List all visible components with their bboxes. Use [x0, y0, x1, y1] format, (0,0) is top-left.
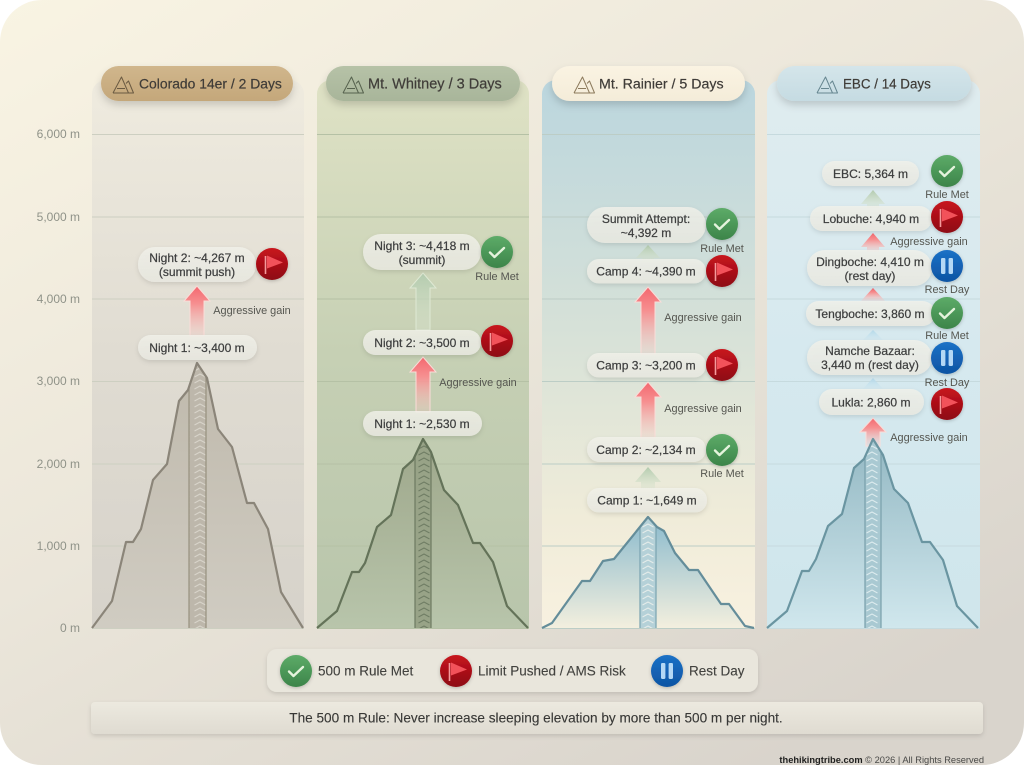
label: Namche Bazaar: Namche Bazaar:: [825, 344, 915, 358]
legend text: rest day: Rest Day: [689, 664, 745, 678]
arrow: rule met Camp 1 to Camp 2: [635, 467, 661, 489]
panel: Mt. Whitney: [317, 66, 529, 629]
caption: rule met: Rule Met: [700, 243, 744, 255]
caption: aggressive gain: Aggressive gain: [890, 432, 968, 444]
label: Lobuche: Lobuche: 4,940 m: [823, 212, 919, 226]
label: Camp 2: [587, 437, 706, 462]
footer credit: thehikingtribe.com © 2026 | All Rights Reserved: [779, 755, 984, 765]
arrow: aggressive gain to Lukla: [860, 418, 886, 446]
icon: red flag: [931, 201, 963, 233]
mountain profile: EBC: [767, 436, 978, 629]
label: Namche Bazaar: 3,440 m (rest day): [821, 358, 919, 372]
label: Namche Bazaar: [807, 340, 932, 375]
icon: legend pause: [651, 655, 683, 687]
panel: EBC: [767, 66, 980, 629]
caption: rule met: Rule Met: [475, 271, 519, 283]
label: Camp 1: [587, 488, 707, 512]
elevation axis labels: 4,000 m: [37, 292, 80, 306]
label: Dingboche: [807, 250, 932, 286]
elevation axis labels: 1,000 m: [37, 539, 80, 553]
elevation axis labels: 3,000 m: [37, 374, 80, 388]
label: Night 3: [363, 234, 481, 270]
caption: rest day: Rest Day: [925, 377, 970, 389]
label: Night 1: Night 1: ~2,530 m: [374, 417, 470, 431]
header: Colorado 14er: Colorado 14er / 2 Days: [139, 76, 282, 92]
mountain profile: Mt. Rainier: [542, 514, 754, 629]
label: Lukla: [819, 389, 924, 415]
rule statement bar: [91, 702, 983, 734]
caption: rule met: Rule Met: [925, 189, 969, 201]
label: Night 2: [138, 247, 256, 282]
icon: check: [931, 297, 963, 329]
label: Night 1: [363, 411, 482, 436]
arrow: Namche to Tengboche: [861, 330, 885, 342]
legend: [267, 649, 758, 692]
arrow: rule met Night 2 to Night 3: [410, 273, 436, 330]
caption: rule met: Rule Met: [925, 330, 969, 342]
label: Camp 4: Camp 4: ~4,390 m: [596, 264, 696, 278]
label: Dingboche: (rest day): [845, 269, 895, 283]
arrow: aggressive gain Night 1 to Night 2: [410, 357, 436, 412]
elevation axis labels: 2,000 m: [37, 457, 80, 471]
label: Night 3: Night 3: ~4,418 m: [374, 239, 470, 253]
legend text: limit pushed: Limit Pushed / AMS Risk: [478, 664, 626, 678]
label: Night 2: Night 2: ~3,500 m: [374, 336, 470, 350]
label: Night 2: (summit push): [159, 265, 235, 279]
label: EBC: [822, 161, 919, 186]
label: Summit Attempt: Summit Attempt:: [602, 212, 690, 226]
icon: red flag: [256, 248, 288, 280]
panel: Mt. Rainier: [542, 66, 755, 629]
icon: check: [706, 208, 738, 240]
label: Lukla: Lukla: 2,860 m: [831, 396, 911, 410]
icon: pause: [931, 342, 963, 374]
label: Camp 2: Camp 2: ~2,134 m: [596, 443, 696, 457]
icon: check: [706, 434, 738, 466]
label: Summit Attempt: ~4,392 m: [621, 226, 671, 240]
label: Camp 3: Camp 3: ~3,200 m: [596, 358, 696, 372]
rule statement bar: The 500 m Rule: Never increase sleeping elevation by more than 500 m per night.: [289, 710, 783, 726]
caption: aggressive gain: Aggressive gain: [213, 305, 291, 317]
label: Dingboche: Dingboche: 4,410 m: [816, 255, 924, 269]
label: Camp 1: Camp 1: ~1,649 m: [597, 494, 697, 508]
icon: check: [931, 155, 963, 187]
icon: red flag: [706, 349, 738, 381]
icon: legend check: [280, 655, 312, 687]
mountain profile: Colorado 14er: [92, 360, 303, 629]
legend text: rule met: 500 m Rule Met: [318, 664, 414, 678]
icon: legend flag: [440, 655, 472, 687]
header: Mt. Whitney: [326, 66, 520, 101]
label: Night 1: [138, 335, 257, 360]
arrow: rule met Camp 4 to Summit: [636, 245, 660, 262]
label: Night 2: Night 2: ~4,267 m: [149, 251, 245, 265]
icon: red flag: [481, 325, 513, 357]
label: Night 3: (summit): [399, 253, 445, 267]
label: Summit Attempt: [587, 207, 706, 243]
label: Night 1: Night 1: ~3,400 m: [149, 341, 245, 355]
label: Tengboche: Tengboche: 3,860 m: [815, 307, 925, 321]
elevation axis labels: [37, 127, 80, 635]
header: Colorado 14er: [101, 66, 293, 101]
header: Mt. Whitney: Mt. Whitney / 3 Days: [368, 76, 502, 92]
header: Mt. Rainier: [552, 66, 745, 101]
panel: Colorado 14er: [92, 66, 304, 629]
caption: aggressive gain: Aggressive gain: [890, 236, 968, 248]
arrow: aggressive gain Tengboche to Dingboche: [861, 288, 885, 301]
arrow: aggressive gain Dingboche to Lobuche: [861, 233, 885, 252]
caption: aggressive gain: Aggressive gain: [664, 403, 742, 415]
arrow: rule met Lobuche to EBC: [861, 190, 885, 208]
header: EBC: [777, 66, 971, 101]
mountain profile: Mt. Whitney: [317, 436, 528, 629]
caption: rest day: Rest Day: [925, 284, 970, 296]
icon: red flag: [931, 388, 963, 420]
arrow: aggressive gain Camp 2 to Camp 3: [635, 382, 661, 438]
icon: pause: [931, 250, 963, 282]
label: Lobuche: [810, 206, 932, 231]
label: EBC: EBC: 5,364 m: [833, 167, 908, 181]
elevation axis labels: 0 m: [60, 621, 80, 635]
label: Night 2: [363, 330, 481, 355]
header: Mt. Rainier: Mt. Rainier / 5 Days: [599, 76, 724, 92]
label: Camp 4: [587, 259, 706, 284]
elevation axis labels: 5,000 m: [37, 210, 80, 224]
caption: rule met: Rule Met: [700, 468, 744, 480]
caption: aggressive gain: Aggressive gain: [439, 377, 517, 389]
arrow: aggressive gain Night 1 to Night 2: [184, 286, 210, 336]
label: Camp 3: [587, 353, 706, 378]
header: EBC: EBC / 14 Days: [843, 76, 931, 92]
arrow: aggressive gain Camp 3 to Camp 4: [635, 287, 661, 354]
label: Tengboche: [806, 301, 935, 326]
caption: aggressive gain: Aggressive gain: [664, 312, 742, 324]
elevation axis labels: 6,000 m: [37, 127, 80, 141]
icon: red flag: [706, 255, 738, 287]
arrow: Lukla to Namche: [861, 378, 885, 391]
icon: check: [481, 236, 513, 268]
